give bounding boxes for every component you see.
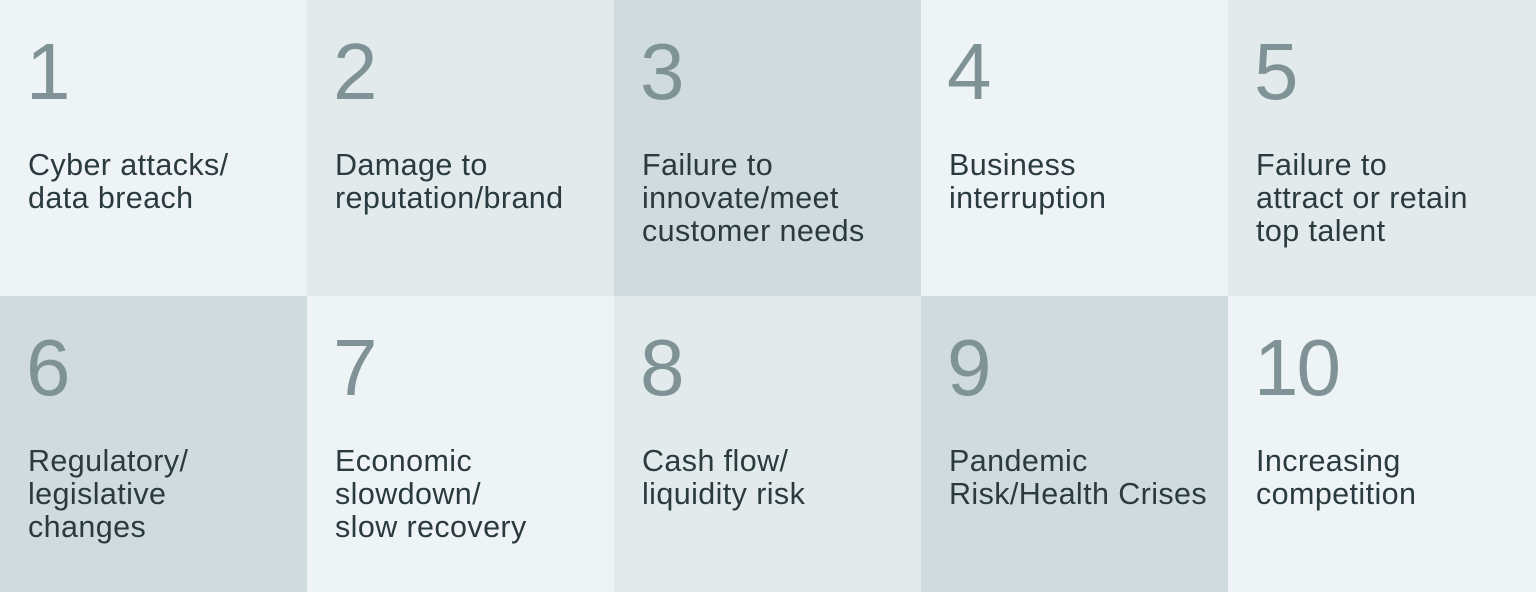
panel: risk 3: Failure to — [642, 148, 773, 182]
panel: risk 6 — [0, 296, 307, 592]
panel: risk 5: attract or retain — [1256, 181, 1468, 215]
panel: risk 2: reputation/brand — [335, 181, 564, 215]
panel: risk 2 — [307, 0, 614, 296]
panel: risk 2: Damage to — [335, 148, 488, 182]
panel: risk 4: 4 — [947, 27, 990, 116]
panel: risk 4: Business — [949, 148, 1076, 182]
panel: risk 9: 9 — [947, 323, 990, 412]
panel: risk 7: Economic — [335, 444, 472, 478]
panel: risk 7: 7 — [333, 323, 376, 412]
panel: risk 8: 8 — [640, 323, 682, 412]
panel: risk 1: 1 — [26, 27, 68, 116]
panel: risk 1: data breach — [28, 181, 194, 215]
panel: risk 9 — [921, 296, 1228, 592]
panel: risk 5: Failure to — [1256, 148, 1387, 182]
panel: risk 1 — [0, 0, 307, 296]
panel: risk 3: 3 — [640, 27, 682, 116]
panel: risk 7: slow recovery — [335, 510, 527, 544]
panel: risk 4: interruption — [949, 181, 1106, 215]
panel: risk 1: Cyber attacks/ — [28, 148, 229, 182]
panel: risk 8: Cash flow/ — [642, 444, 788, 478]
panel: risk 3: innovate/meet — [642, 181, 839, 215]
panel: risk 9: Pandemic — [949, 444, 1088, 478]
panel: risk 5: 5 — [1254, 27, 1296, 116]
panel: risk 6: legislative — [28, 477, 166, 511]
panel: risk 3 — [614, 0, 921, 296]
panel: risk 10 — [1228, 296, 1536, 592]
panel: risk 10: competition — [1256, 477, 1416, 511]
panel: risk 7 — [307, 296, 614, 592]
panel: risk 6: changes — [28, 510, 146, 544]
panel: risk 5 — [1228, 0, 1536, 296]
panel: risk 3: customer needs — [642, 214, 865, 248]
panel: risk 6: Regulatory/ — [28, 444, 188, 478]
panel: risk 6: 6 — [26, 323, 68, 412]
panel: risk 8: liquidity risk — [642, 477, 805, 511]
panel: risk 4 — [921, 0, 1228, 296]
panel: risk 8 — [614, 296, 921, 592]
panel: risk 10: 10 — [1254, 323, 1339, 412]
panel: risk 7: slowdown/ — [335, 477, 481, 511]
panel: risk 2: 2 — [333, 27, 376, 116]
panel: risk 5: top talent — [1256, 214, 1386, 248]
panel: risk 10: Increasing — [1256, 444, 1401, 478]
panel: risk 9: Risk/Health Crises — [949, 477, 1207, 511]
